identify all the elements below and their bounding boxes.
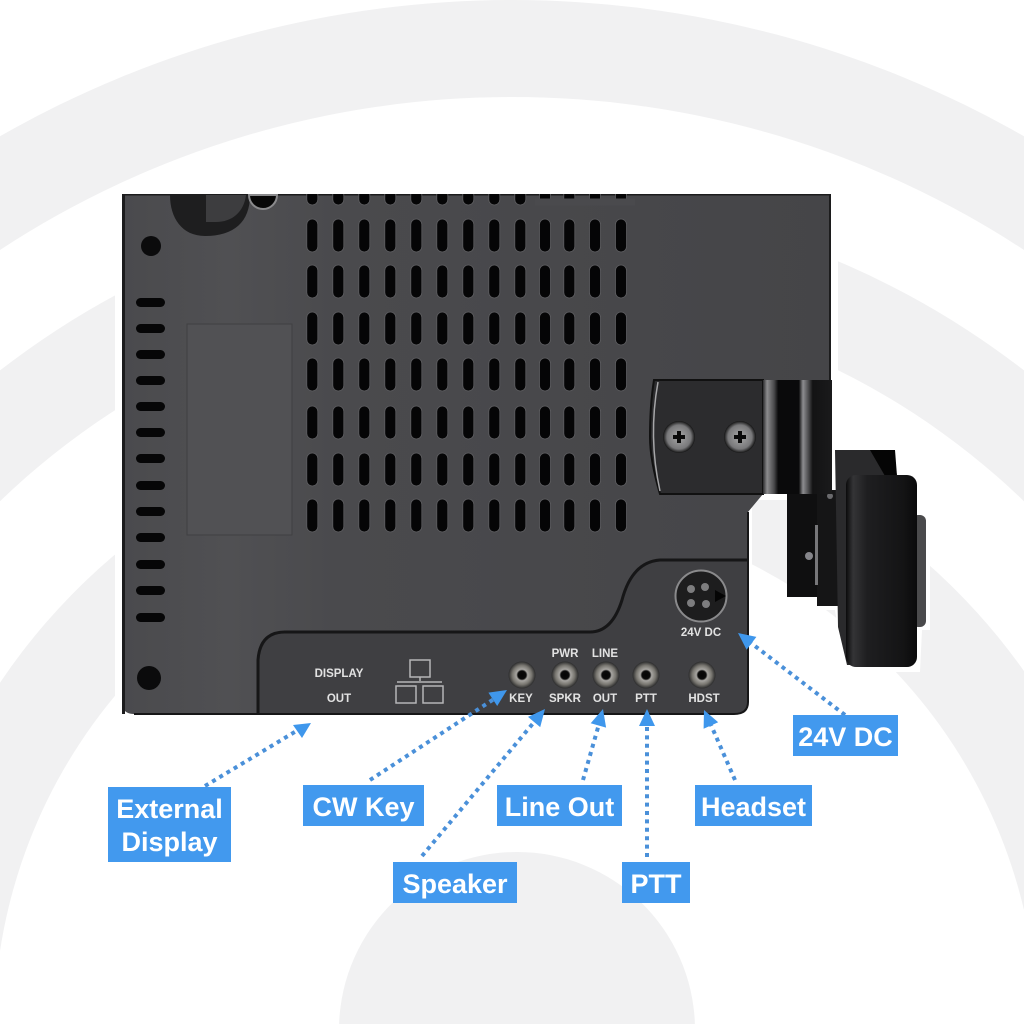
knob back plate bbox=[835, 450, 897, 665]
jack labels: SPKR bbox=[549, 693, 582, 705]
mount bracket and knob assembly bbox=[787, 450, 926, 667]
jack labels: PWR bbox=[552, 648, 579, 660]
arrow: external display bbox=[205, 723, 311, 786]
audio jacks bbox=[508, 662, 716, 688]
arrow: speaker bbox=[422, 709, 545, 856]
device body bbox=[122, 194, 831, 714]
ventilation slots bbox=[307, 172, 635, 532]
jack labels: HDST bbox=[688, 693, 720, 705]
label: ptt: PTT bbox=[630, 869, 682, 899]
display out port text bbox=[315, 668, 364, 705]
label: external display: External bbox=[116, 794, 223, 824]
display out port text: OUT bbox=[327, 693, 351, 705]
label: line out: Line Out bbox=[505, 792, 614, 822]
label plate bbox=[187, 324, 292, 535]
label: speaker: Speaker bbox=[402, 869, 508, 899]
24V DC connector: 24V DC bbox=[681, 627, 721, 639]
label: 24v dc: 24V DC bbox=[798, 722, 893, 752]
jack labels bbox=[509, 648, 720, 705]
jack labels: KEY bbox=[509, 693, 533, 705]
label: headset bbox=[695, 785, 812, 826]
arrow: 24v dc bbox=[738, 633, 845, 715]
arrow: cw key bbox=[370, 690, 507, 780]
recessed lower panel bbox=[258, 560, 748, 714]
icon: network bbox=[396, 660, 443, 703]
label: speaker bbox=[393, 862, 517, 903]
label: line out bbox=[497, 785, 622, 826]
white halo behind device bbox=[115, 194, 930, 720]
label: cw key: CW Key bbox=[312, 792, 415, 822]
label: ptt bbox=[622, 862, 690, 903]
top knob recess and screws bbox=[137, 195, 277, 690]
jack labels: LINE bbox=[592, 648, 618, 660]
lower hinge arm bbox=[787, 490, 842, 606]
label: headset: Headset bbox=[701, 792, 806, 822]
label: external display: Display bbox=[121, 827, 218, 857]
knob cap bbox=[912, 515, 926, 627]
display out port text: DISPLAY bbox=[315, 668, 364, 680]
hinge plate bbox=[650, 380, 832, 494]
arrow: ptt bbox=[639, 709, 655, 857]
knob wheel bbox=[846, 475, 917, 667]
jack labels: PTT bbox=[635, 693, 657, 705]
left side slots bbox=[136, 298, 165, 622]
label: external display bbox=[108, 787, 231, 862]
plate screws bbox=[663, 421, 756, 453]
label: 24v dc bbox=[793, 715, 898, 756]
jack labels: OUT bbox=[593, 693, 617, 705]
arrow: line out bbox=[583, 709, 606, 780]
24V DC connector bbox=[676, 570, 726, 639]
label: cw key bbox=[303, 785, 424, 826]
arrow: headset bbox=[704, 710, 735, 780]
